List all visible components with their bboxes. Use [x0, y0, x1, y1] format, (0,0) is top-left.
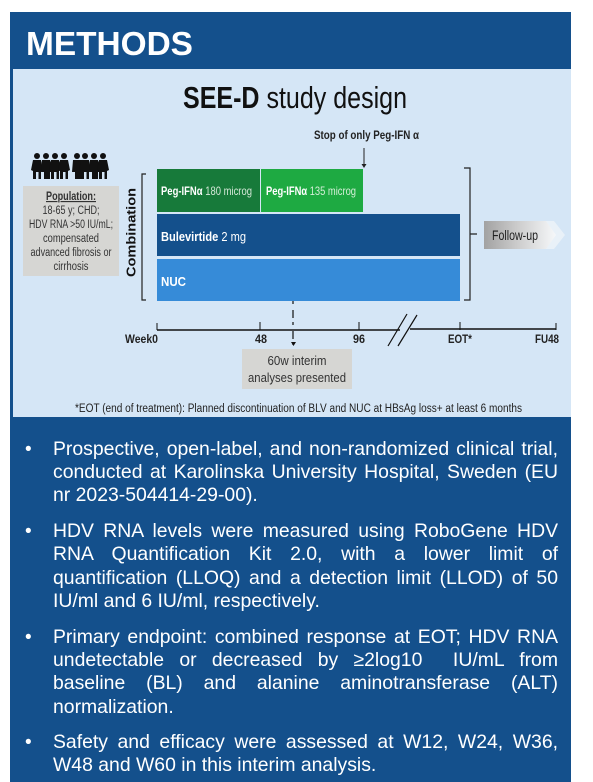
timeline labels: EOT* [448, 332, 472, 346]
population box [23, 186, 119, 276]
text: Prospective, open-label, and non-randomized clinical trial, [53, 438, 558, 460]
interim dashed arrow [291, 301, 296, 346]
bullet: trial design [25, 438, 558, 506]
bar: nuc: NUC [161, 274, 187, 289]
text: Safety and efficacy were assessed at W12, W24, W36, [53, 731, 558, 753]
bullet: primary endpoint [25, 626, 558, 718]
bar: nuc [157, 259, 460, 301]
heading: methods: METHODS [26, 26, 193, 63]
bullet: safety and efficacy [25, 731, 558, 776]
bar: peg-ifn 135 [261, 169, 363, 212]
panel: study design diagram [13, 69, 571, 417]
stop annotation: Stop of only Peg-IFN α [314, 130, 419, 142]
text: RNA Quantification Kit 2.0, with a lower limit of [53, 543, 558, 565]
text: • [25, 732, 32, 753]
bar: peg-ifn 135: Peg-IFNα 135 microg [266, 184, 356, 198]
population box: advanced fibrosis or [30, 247, 112, 259]
text: HDV RNA levels were measured using RoboGene HDV [53, 520, 558, 542]
text: undetectable or decreased by ≥2log10 IU/mL from [53, 649, 558, 671]
interim analyses box: 60w interim [268, 353, 326, 368]
timeline [157, 314, 556, 346]
text: conducted at Karolinska University Hospital, Sweden (EU [53, 461, 558, 483]
bar: peg-ifn 180: Peg-IFNα 180 microg [161, 184, 252, 198]
stop annotation [314, 130, 419, 168]
text: baseline (BL) and alanine aminotransferase (ALT) [53, 672, 558, 694]
text: nr 2023-504414-29-00). [53, 484, 258, 506]
timeline labels: 96 [353, 332, 365, 346]
text: • [25, 521, 32, 542]
bar: bulevirtide: Bulevirtide 2 mg [161, 229, 246, 244]
text: quantification (LLOQ) and a detection limit (LLOD) of 50 [53, 567, 558, 589]
population box: compensated [43, 233, 99, 245]
bar: peg-ifn 180 [157, 169, 260, 212]
left bracket [142, 174, 146, 300]
icon: patient group [31, 153, 109, 179]
timeline labels: 48 [255, 332, 267, 346]
timeline labels: Week0 [125, 332, 158, 346]
diagram title: SEE-D study design [183, 80, 407, 115]
text: IU/ml and 6 IU/ml, respectively. [53, 590, 320, 612]
population box: Population: [46, 191, 96, 203]
follow-up arrow [484, 221, 565, 249]
footnote: *EOT (end of treatment): Planned discontinuation of BLV and NUC at HBsAg loss+ at least 6 months [75, 403, 522, 415]
population box: HDV RNA >50 IU/mL; [29, 219, 113, 231]
text: • [25, 439, 32, 460]
population box: cirrhosis [54, 261, 89, 273]
timeline labels [125, 332, 559, 346]
text: • [25, 627, 32, 648]
combination label: Combination [124, 188, 138, 277]
interim analyses box [242, 349, 352, 389]
text: W48 and W60 in this interim analysis. [53, 754, 376, 776]
timeline labels: FU48 [535, 332, 559, 346]
bullet: hdv rna measurement [25, 520, 558, 612]
text: Primary endpoint: combined response at EOT; HDV RNA [53, 626, 558, 648]
interim analyses box: analyses presented [248, 370, 346, 385]
right bracket [464, 168, 477, 300]
population box: 18-65 y; CHD; [42, 205, 100, 217]
text: normalization. [53, 696, 174, 718]
bar: bulevirtide [157, 214, 460, 256]
follow-up arrow: Follow-up [492, 228, 538, 243]
